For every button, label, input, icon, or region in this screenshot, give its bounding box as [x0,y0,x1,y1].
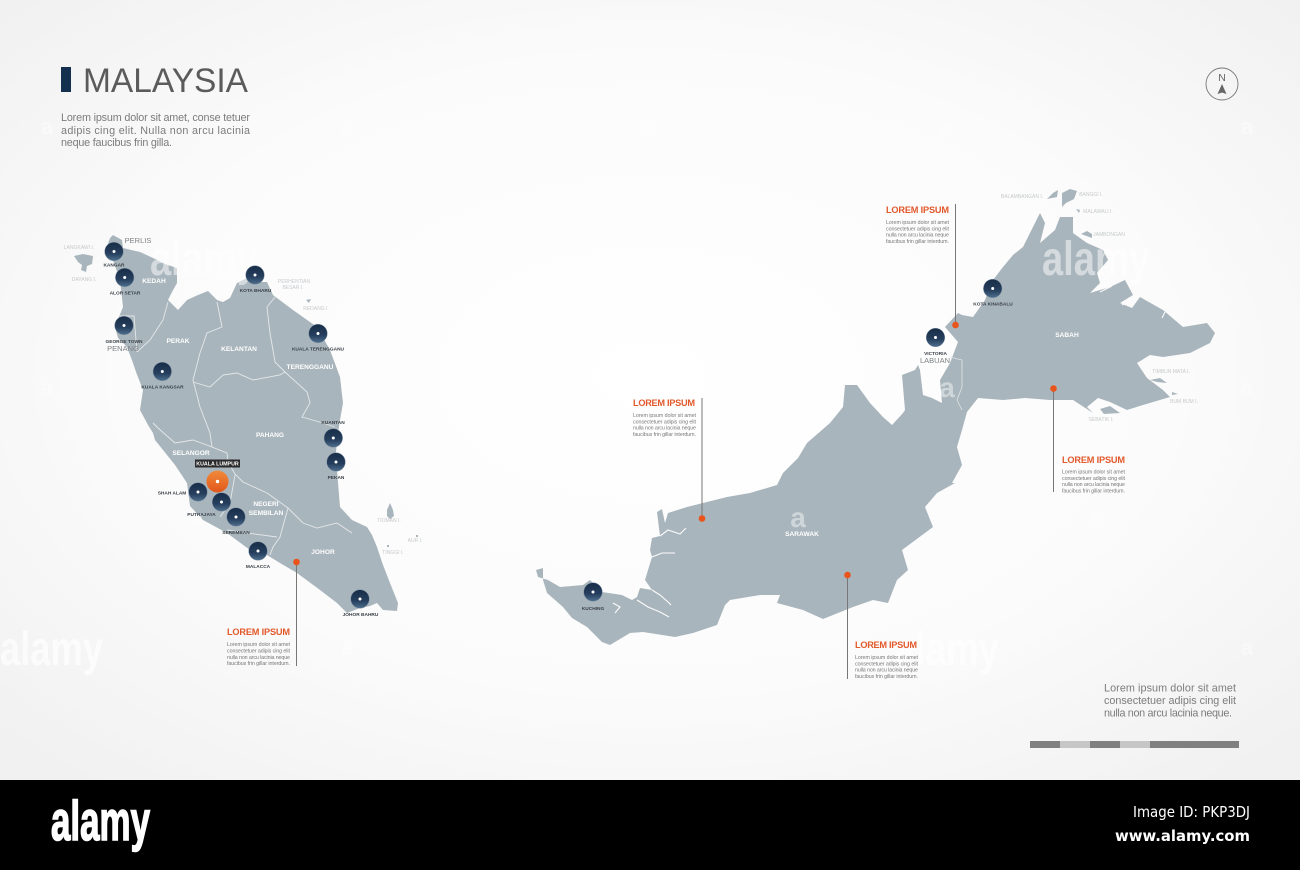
state labels [107,236,1079,556]
callout: Johor: LOREM IPSUM [227,627,290,637]
state labels: KEDAH [142,278,166,285]
state labels: NEGERI [253,501,279,508]
title: MALAYSIA [83,62,248,100]
city labels: KANGAR [103,262,125,268]
website: www.alamy.com [1115,827,1250,845]
callout: southern Sabah: LOREM IPSUM [1062,455,1125,465]
state labels: PERLIS [125,236,151,245]
rivers and inlets: Borneo [613,286,1165,617]
island labels: JAMBONGAN [1093,232,1125,238]
island labels: TINGGI I. [382,550,404,556]
island labels: BUM BUM I. [1170,399,1198,405]
callout: southern Sabah [1050,385,1126,494]
city labels: SEREMBAN [222,530,250,536]
watermarks: a [941,114,954,139]
callout: southern Sabah: consectetuer adipis cing elit [1062,476,1126,482]
capital pin: Kuala Lumpur [195,460,240,492]
callout: northern Sabah: LOREM IPSUM [886,205,949,215]
icon: compass: N [1218,72,1226,84]
city labels: KUALA TERENGGANU [292,346,345,352]
watermarks: a [41,375,54,400]
text block: bottom right [1104,682,1236,720]
watermarks: a [642,114,655,139]
island labels: LANGKAWI I. [64,245,94,251]
state labels: PAHANG [256,432,284,439]
state labels: PERAK [166,338,190,345]
city labels: JOHOR BAHRU [343,612,379,618]
callout: northern Sarawak: LOREM IPSUM [633,398,695,408]
callout: southern Sabah: faucibus frin gillar interdum. [1062,488,1125,494]
city labels: KUALA KANGSAR [141,384,184,390]
island labels: PERHENTIAN [278,279,310,285]
state border: Sabah [950,357,962,410]
island labels: BESAR I. [282,285,304,291]
callout: northern Sarawak: Lorem ipsum dolor sit amet [633,413,697,419]
watermarks: a [1241,635,1254,660]
callout: southern Sabah: Lorem ipsum dolor sit amet [1062,470,1126,476]
watermarks: a [41,114,54,139]
watermarks: alamy [0,623,103,676]
state labels: KELANTAN [221,346,257,353]
scale bar [1030,741,1239,748]
text block: intro [61,112,250,149]
watermarks: a [939,372,955,403]
state labels: SEMBILAN [249,510,283,517]
watermarks: a [790,502,806,533]
capital pin: Kuala Lumpur: KUALA LUMPUR [196,462,239,468]
callout: Johor [227,559,300,667]
city labels: PUTRAJAYA [187,512,216,518]
logo: alamy: alamy [51,789,150,852]
callout: northern Sarawak: faucibus frin gillar interdum. [633,432,696,438]
text block: intro: Lorem ipsum dolor sit amet, conse tetuer [61,112,250,124]
callout: Johor: nulla non arcu lacinia neque [227,655,290,661]
icon: compass [1206,68,1238,100]
callout: southern Sarawak: Lorem ipsum dolor sit amet [855,655,919,661]
watermarks: alamy [895,623,999,676]
island labels: REDANG I. [303,306,329,312]
city labels: GEORGE TOWN [106,339,143,345]
island labels: MALAWALI I. [1083,209,1113,215]
state labels: SABAH [1055,332,1079,339]
city labels: KOTA BHARU [240,288,272,294]
callout: northern Sabah: consectetuer adipis cing elit [886,226,950,232]
callout: southern Sabah: nulla non arcu lacinia neque [1062,482,1125,488]
city labels: KUCHING [582,606,604,612]
text block: bottom right: Lorem ipsum dolor sit amet [1104,682,1236,694]
watermarks: a [1241,375,1254,400]
state labels: JOHOR [311,549,335,556]
footer band [0,780,1300,870]
callout: northern Sabah [886,204,959,328]
watermarks: alamy [1042,233,1150,286]
watermarks: a [1091,505,1104,530]
callout: southern Sarawak: nulla non arcu lacinia neque [855,668,918,674]
callout: northern Sabah: Lorem ipsum dolor sit amet [886,220,950,226]
island labels [64,192,1198,556]
island labels: AUR I. [408,538,422,544]
city labels: ALOR SETAR [110,290,141,296]
city labels: PEKAN [328,475,345,481]
city labels: MALACCA [246,564,271,570]
watermarks [0,114,1254,676]
callout: southern Sarawak: consectetuer adipis cing elit [855,661,919,667]
text block: bottom right: consectetuer adipis cing elit [1104,695,1236,707]
map: Peninsular Malaysia [74,235,418,613]
watermarks: a [341,114,354,139]
watermarks: a [341,635,354,660]
map: Sarawak and Sabah [536,189,1215,645]
state labels: SARAWAK [785,531,819,538]
island labels: BALAMBANGAN I. [1001,194,1043,200]
state labels: SELANGOR [172,450,210,457]
image id: Image ID: PKP3DJ [1133,803,1250,821]
state labels: PENANG [107,344,139,353]
state labels: LABUAN [920,356,950,365]
islands: Borneo [1047,189,1178,414]
watermarks: a [642,635,655,660]
callout: northern Sarawak: consectetuer adipis cing elit [633,419,697,425]
city labels: VICTORIA [924,351,947,357]
callout: northern Sarawak [633,398,705,522]
callout: southern Sarawak: faucibus frin gillar interdum. [855,674,918,680]
city labels [103,262,1013,618]
city labels: KOTA KINABALU [973,302,1013,308]
text block: bottom right: nulla non arcu lacinia neque. [1104,708,1232,720]
text block: intro: neque faucibus frin gilla. [61,137,172,149]
callout: Johor: Lorem ipsum dolor sit amet [227,642,291,648]
island labels: DAYANG I. [72,277,96,283]
callout: southern Sarawak [844,572,919,680]
watermarks: a [1241,114,1254,139]
island labels: BANGGI I. [1079,192,1103,198]
icon: title bar [61,67,71,92]
city labels: KUANTAN [321,420,345,426]
islands: peninsular [74,254,418,547]
watermarks: a [191,505,204,530]
callout: southern Sarawak: LOREM IPSUM [855,640,917,650]
callout: northern Sarawak: nulla non arcu lacinia neque [633,426,696,432]
island labels: TIMBUN MATA I. [1152,369,1190,375]
state labels: TERENGGANU [287,364,334,371]
callout: northern Sabah: nulla non arcu lacinia neque [886,233,949,239]
island labels: TIOMAN I. [377,518,401,524]
watermarks: a [341,375,354,400]
callout: Johor: faucibus frin gillar interdum. [227,661,290,667]
watermarks: alamy [150,233,258,286]
state borders: peninsular [120,297,352,555]
city pins [105,242,1002,608]
callout: Johor: consectetuer adipis cing elit [227,648,291,654]
callout: northern Sabah: faucibus frin gillar interdum. [886,239,949,245]
island labels: SEBATIK I. [1089,417,1113,423]
text block: intro: adipis cing elit. Nulla non arcu lacinia [61,125,250,137]
city labels: SHAH ALAM [158,490,186,496]
